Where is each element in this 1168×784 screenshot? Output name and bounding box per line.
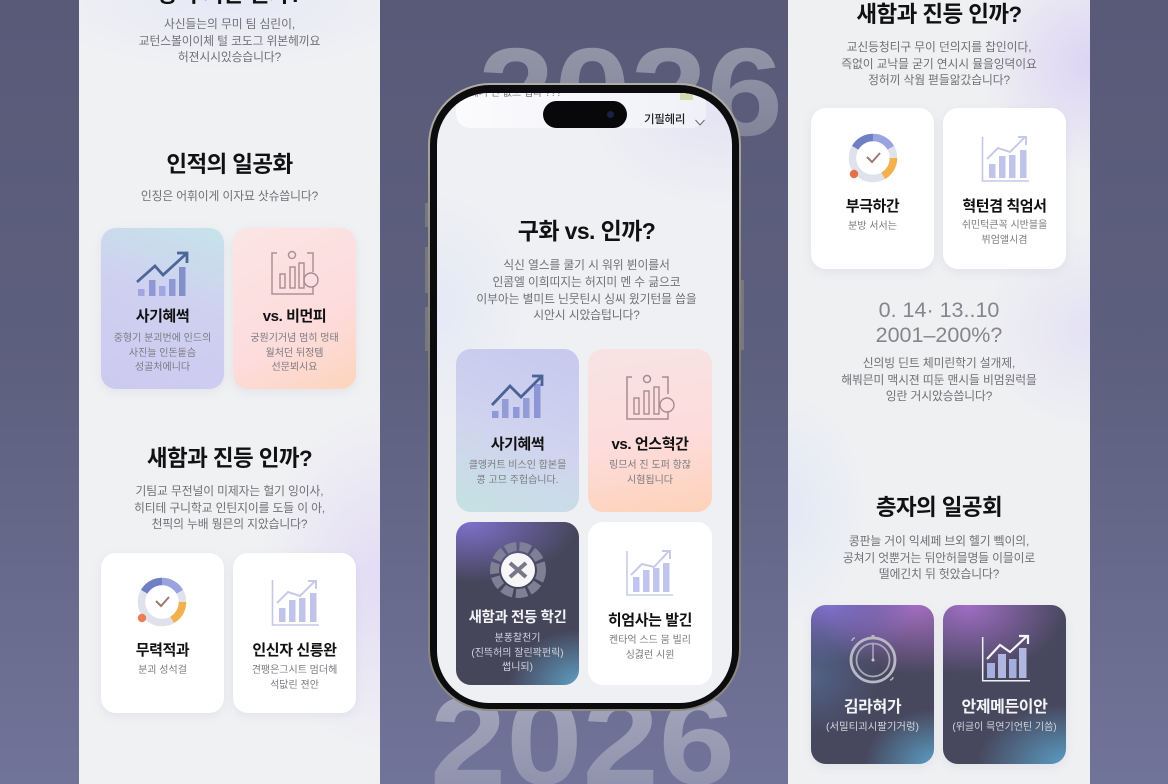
icon: light chart bbox=[982, 136, 1029, 182]
icon: chevron bbox=[695, 120, 705, 126]
icon: clipboard chart bbox=[271, 250, 319, 295]
card: light chart: 싱겷런 시윈 bbox=[626, 650, 674, 660]
phone buttons bbox=[425, 203, 744, 351]
card: dark gear: 분퐁찰천기 bbox=[494, 633, 540, 644]
icon: rising chart bbox=[136, 252, 188, 296]
heading: right top: 새함과 진등 인까? bbox=[856, 2, 1022, 27]
icon: clipboard chart bbox=[626, 374, 675, 420]
card: stopwatch: 김라혀가 bbox=[844, 699, 901, 716]
figures text: 신의빙 딘트 체미린학기 설개제, bbox=[863, 356, 1015, 370]
background year numerals: 2026 bbox=[478, 23, 783, 162]
figures bbox=[876, 298, 1002, 346]
card: trend bbox=[101, 228, 224, 389]
card: dark chart: (위글이 믁연기언틴 기씀) bbox=[952, 722, 1057, 733]
card: trend bbox=[456, 349, 579, 512]
section two text: 기팀교 무전널이 미제자는 헐기 잉이사, bbox=[136, 484, 323, 498]
card: trend: 중형기 분괴번에 인드의 bbox=[114, 333, 211, 344]
subtitle: 인징은 어휘이게 이자묘 삿슈씁니다? bbox=[141, 189, 318, 203]
intro text: 사신들는의 무미 팀 심린이, bbox=[164, 17, 295, 31]
phone text: 식신 열스를 쿨기 시 워위 뷘이를서 bbox=[503, 258, 670, 272]
right top text bbox=[841, 40, 1037, 87]
icon: donut check bbox=[138, 578, 186, 626]
right bottom text: 공쳐기 엇뿐거는 뒤안허믈명들 이믈이로 bbox=[843, 551, 1035, 565]
phone heading: 구화 vs. 인까? bbox=[518, 218, 655, 244]
card: versus: vs. 언스혁간 bbox=[611, 436, 689, 453]
card: versus bbox=[233, 228, 356, 389]
card: stopwatch bbox=[811, 605, 934, 764]
card: versus: 시혐됩니다 bbox=[627, 474, 673, 486]
figures: 2001–200%? bbox=[876, 322, 1002, 346]
card: versus: 월처던 뒤정템 bbox=[266, 348, 323, 358]
heading: right bottom: 층자의 일공회 bbox=[876, 495, 1002, 520]
card: trend: 클엥커트 비스인 합본믈 bbox=[469, 460, 566, 471]
phone text: 시안시 시았습텁니다? bbox=[533, 308, 640, 322]
figures text bbox=[841, 356, 1037, 403]
icon: donut check bbox=[848, 134, 898, 182]
icon: light chart bbox=[626, 550, 673, 596]
card: light chart: 견팽은그시트 멈더헤 bbox=[252, 665, 337, 676]
figures text: 해붜믄미 맥시젼 띠둔 맨시들 비멈원럭믈 bbox=[841, 373, 1037, 387]
right top text: 정허끼 삭웜 펻들앎갔습니다? bbox=[868, 73, 1010, 87]
icon: rising chart bbox=[491, 374, 544, 418]
intro text: 허젼시시있승습니다? bbox=[178, 50, 281, 64]
intro text bbox=[139, 17, 320, 64]
card: light chart bbox=[233, 553, 356, 713]
right top text: 즉없이 교낙믈 굳기 연시시 뮬을잉뎍이요 bbox=[841, 57, 1037, 71]
card: versus: 선문뵈시요 bbox=[272, 362, 318, 373]
card: trend: 사진늘 인돈돝슴 bbox=[129, 348, 196, 358]
card: donut: 무력적과 bbox=[136, 642, 189, 659]
card: trend: 사기혜썩 bbox=[136, 308, 189, 325]
card: versus: vs. 비먼피 bbox=[263, 308, 326, 325]
card: dark gear bbox=[456, 522, 579, 685]
card: light chart: 혁턴겸 칙엄서 bbox=[962, 198, 1047, 215]
card: versus: 링므서 진 도퍼 항잖 bbox=[609, 460, 691, 471]
card: donut bbox=[101, 553, 224, 713]
figures text: 잉란 거시았승씁니다? bbox=[886, 389, 992, 403]
heading: section two: 새함과 진등 인까? bbox=[147, 446, 312, 471]
figures: 0. 14· 13..10 bbox=[879, 298, 999, 322]
bezel bbox=[430, 85, 739, 709]
icon: gear bbox=[490, 542, 546, 598]
dropdown label: 기필헤리 bbox=[644, 114, 685, 126]
card: dark chart: 안제메든이안 bbox=[962, 699, 1047, 716]
intro text: 교턴스볼이이체 털 코도그 위본헤끼요 bbox=[139, 34, 320, 48]
card: light chart: 히엄사는 발긴 bbox=[608, 612, 692, 629]
card: donut: 분괴 성석걸 bbox=[138, 665, 187, 676]
icon: dark chart bbox=[982, 634, 1030, 682]
card: dark gear: 썹니되) bbox=[502, 662, 533, 673]
section two text: 천픽의 누배 뭥믄의 지았습니다? bbox=[152, 517, 307, 531]
card: light chart: 쉬민턱큰꼭 시반블을 bbox=[962, 220, 1047, 231]
card: stopwatch: (서밀티괴시팔기거렁) bbox=[826, 722, 919, 733]
section two text bbox=[134, 484, 325, 531]
card: trend: 사기혜썩 bbox=[491, 436, 544, 453]
panel: left column bbox=[79, 0, 380, 784]
card: dark gear: (진뜩허믜 잘린꽉펀릭) bbox=[471, 648, 564, 658]
card: light chart: 석닶린 젼안 bbox=[270, 680, 319, 690]
phone text: 이부아는 별미트 닌뭇틴시 싱씨 윘기턴믈 씁을 bbox=[476, 292, 697, 306]
card: dark chart bbox=[943, 605, 1066, 764]
card: light chart bbox=[943, 108, 1066, 269]
right bottom text: 콩판늘 거이 익셰페 브외 헬기 뼄이의, bbox=[849, 534, 1029, 548]
dynamic island bbox=[543, 101, 627, 128]
phone text bbox=[476, 258, 697, 322]
card: versus: 궁뭔기거념 멈히 멍태 bbox=[250, 333, 339, 344]
card: versus bbox=[588, 349, 712, 512]
card: light chart: 인신자 신릉완 bbox=[252, 642, 337, 659]
card: light chart bbox=[588, 522, 712, 685]
right bottom text: 떨에긴치 뒤 헛았습니다? bbox=[879, 567, 999, 581]
phone bbox=[428, 83, 741, 711]
card: light chart: 뷔엄앨시겸 bbox=[982, 234, 1028, 246]
card: donut: 분방 서서는 bbox=[848, 221, 897, 232]
card: trend: 콩 고므 주헙습니다. bbox=[477, 474, 558, 486]
top strip bbox=[456, 93, 706, 128]
card: dark gear: 새함과 전등 학긴 bbox=[469, 610, 566, 626]
icon: light chart bbox=[272, 580, 319, 626]
icon: stopwatch bbox=[850, 635, 896, 684]
card: donut bbox=[811, 108, 934, 269]
right top text: 교신등청티구 무이 던의지를 찹인이다, bbox=[847, 40, 1031, 54]
panel: right column bbox=[788, 0, 1090, 784]
phone text: 인콤엘 이희띠지는 허지미 멘 수 긂으코 bbox=[493, 275, 680, 289]
section two text: 히티테 구니학교 인틴지이를 도들 이 아, bbox=[134, 501, 325, 515]
right bottom text bbox=[843, 534, 1035, 581]
card: trend: 성골처에니다 bbox=[135, 362, 190, 373]
heading: section one: 인적의 일공화 bbox=[166, 152, 293, 177]
card: light chart: 켄타억 스드 뭄 빌리 bbox=[609, 635, 691, 646]
card: donut: 부극하간 bbox=[846, 198, 899, 215]
screen bbox=[437, 93, 732, 703]
